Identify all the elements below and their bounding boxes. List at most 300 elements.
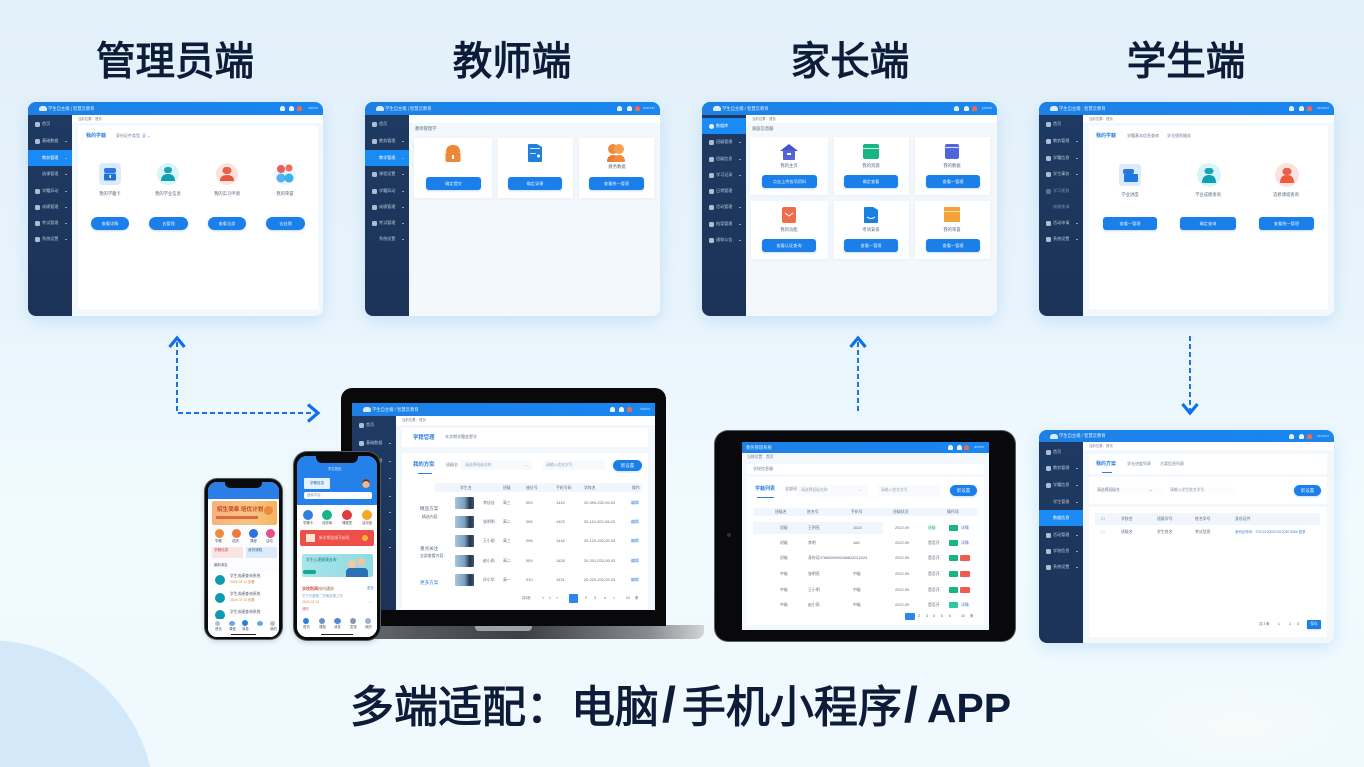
admin sidebar: 考试管理 <box>42 220 58 225</box>
title: student: 学生端 <box>1127 40 1245 84</box>
tablet table card: 请输入姓名学号 <box>881 488 908 492</box>
tablet screen: 当前位置：首页 <box>747 455 774 459</box>
card labels <box>99 190 294 196</box>
card labels: 我的实习申请 <box>214 191 240 196</box>
laptop table: 006 <box>526 519 532 524</box>
tablet table: 王小明 <box>808 587 820 592</box>
card: blue file: 考试安排 <box>862 227 880 232</box>
card: orange group <box>579 138 654 198</box>
card: green: 我的资源 <box>862 163 880 168</box>
large phone icon row: 活动室 <box>362 521 372 525</box>
laptop base <box>342 625 704 639</box>
student sidebar: 活动申请 <box>1053 220 1069 225</box>
admin sidebar: 选课管理 <box>42 171 58 176</box>
large phone icon row: 课程表 <box>342 521 352 525</box>
table card: 身份证件 <box>1235 516 1251 521</box>
laptop table: 1431 <box>556 577 565 582</box>
pagination: 3 <box>1297 622 1299 626</box>
large phone icon row: 成绩单 <box>322 521 332 525</box>
table view sidebar: 学校信息 <box>1053 548 1069 553</box>
laptop table: 20-090-202-09-03 <box>584 500 615 505</box>
card: indigo: 我的数据 <box>943 163 961 168</box>
student sidebar: 首页 <box>1053 121 1061 126</box>
laptop screen <box>352 403 655 610</box>
tablet table: 初级 <box>780 555 788 560</box>
large phone name card: 学籍信息 <box>310 481 324 485</box>
card: red clipboard <box>751 201 828 259</box>
laptop bezel <box>341 388 666 626</box>
large phone name card <box>304 478 330 489</box>
laptop table: 20-110-202-09-03 <box>584 519 615 524</box>
student sidebar: 学习规划 <box>1053 188 1069 193</box>
card labels: 我的学业信息 <box>155 191 181 196</box>
laptop table: 操作 <box>632 485 640 490</box>
icon: red user <box>216 163 238 185</box>
large phone text rows <box>302 586 374 611</box>
title: parent: 家长端 <box>791 40 909 84</box>
tablet table: 操作项 <box>947 509 959 514</box>
laptop button <box>613 460 642 471</box>
laptop table: 编辑 <box>631 577 639 582</box>
tablet table: 中级 <box>853 602 861 607</box>
tablet pagination <box>905 613 974 620</box>
laptop table: 1415 <box>556 500 565 505</box>
table card: 学校名 <box>1121 516 1133 521</box>
card: orange group: 教务数据 <box>608 164 626 169</box>
icon: group <box>274 163 296 185</box>
large phone blue header <box>297 456 377 505</box>
admin sidebar <box>28 102 72 316</box>
laptop table: 孙小华 <box>483 577 495 582</box>
student sidebar <box>1039 102 1083 316</box>
laptop table: 003 <box>526 500 532 505</box>
pagination: 2 <box>1289 622 1291 626</box>
card: blue file: 查看一管理 <box>861 243 881 248</box>
admin content card: 身份证件类型 <box>116 133 140 138</box>
parent section heading: 家庭信息服 <box>752 126 773 131</box>
tablet table: 2022.09 <box>895 587 909 592</box>
panel: student dashboard: 当前位置：首页 <box>1089 117 1113 121</box>
laptop header: 学生自主端 / 智慧云教育 <box>372 407 419 412</box>
card: green <box>834 137 909 195</box>
bottom caption: 多端适配：电脑/手机小程序/APP <box>350 677 1011 733</box>
tablet pagination: 6 <box>949 614 951 618</box>
small phone tab bar: 首页 <box>215 627 222 631</box>
tablet table: 2022.09 <box>895 602 909 607</box>
laptop screen: 当前位置：首页 <box>402 418 426 422</box>
tablet table: 2022.09 <box>895 540 909 545</box>
tablet table card <box>747 477 984 625</box>
laptop pagination <box>522 594 638 603</box>
small phone screen <box>208 482 279 637</box>
arrow: down from student <box>1181 336 1199 416</box>
laptop table: 20-120-202-09-03 <box>584 538 615 543</box>
card: red clipboard: 我的功能 <box>780 227 798 232</box>
laptop table: 手机号码 <box>556 485 572 490</box>
card buttons: 查看一管理 <box>1120 221 1140 226</box>
teacher sidebar: 教务管理 <box>379 138 395 143</box>
card: green: 确定查看 <box>863 179 879 184</box>
large phone tab bar: 发现 <box>350 625 357 629</box>
large phone tab bar: 课程 <box>319 625 326 629</box>
device: small phone <box>205 479 282 639</box>
table view sidebar: 教务管理 <box>1053 465 1069 470</box>
laptop table: 编辑 <box>631 558 639 563</box>
card buttons: 去处理 <box>279 221 292 226</box>
card labels: 学业进度 <box>1121 192 1139 197</box>
filter card: 请输入学生姓名学号 <box>1170 488 1204 492</box>
small phone icon row: 学籍 <box>215 539 222 543</box>
teacher header bar: 学生自主端 | 智慧云教育 <box>385 106 431 111</box>
panel: student dashboard <box>1039 102 1334 316</box>
small phone top bar <box>208 482 279 499</box>
card: blue file <box>834 201 909 259</box>
parent sidebar: 数据库 <box>716 123 728 128</box>
card: orange box: 查看一管理 <box>943 243 963 248</box>
tablet header: admin <box>974 445 984 449</box>
small phone tab bar: 课程 <box>229 627 236 631</box>
laptop table: 010 <box>526 577 532 582</box>
tablet table: 手机号 <box>851 509 863 514</box>
small phone tab bar: 我的 <box>270 627 277 631</box>
tablet table: 王明亮 <box>808 525 820 530</box>
tablet table: 班级状况 <box>893 509 909 514</box>
student sidebar: 成绩查询 <box>1053 204 1069 209</box>
laptop pagination: > <box>613 596 615 600</box>
card: orange box: 我的荣誉 <box>943 227 961 232</box>
tablet pagination: 3 <box>926 614 928 618</box>
student sidebar: 教务管理 <box>1053 138 1069 143</box>
tablet table: 中级 <box>780 587 788 592</box>
teacher sidebar: 学籍异动 <box>379 188 395 193</box>
table view header: 学生自主端 / 智慧云教育 <box>1059 433 1106 438</box>
small phone promo banner: 招生简章 培优计划 <box>217 507 263 513</box>
small phone two tiles <box>212 547 277 558</box>
laptop header: admin <box>640 407 650 411</box>
card labels: 我的学籍卡 <box>99 191 121 196</box>
tablet table: 班级 <box>928 525 936 530</box>
admin header bar: 学生自主端 | 智慧云教育 <box>48 106 94 111</box>
title: admin: 管理员端 <box>96 40 254 84</box>
pagination: 1 <box>1278 622 1280 626</box>
panel: admin dashboard: 当前位置：首页 <box>78 117 102 121</box>
small phone icon row: 课程 <box>250 539 257 543</box>
laptop table card: 我的方案 <box>413 462 435 468</box>
admin content card: 我的学籍 <box>86 133 106 139</box>
card: home: 我的主页 <box>780 163 798 168</box>
card: orange lock: 确定提交 <box>445 181 462 186</box>
large phone icon row <box>303 510 372 525</box>
admin content card: 全 ⌄ <box>142 133 150 138</box>
tabs card <box>1089 454 1327 474</box>
card: home: 点击上传各项资料 <box>773 179 806 184</box>
laptop sidebar: 首页 <box>366 422 374 427</box>
card labels: 学业成绩查询 <box>1195 192 1221 197</box>
small phone list: 学生成绩查询系统 <box>230 574 260 578</box>
large phone screen <box>297 456 377 637</box>
teacher sidebar: 首页 <box>379 121 387 126</box>
large phone red banner: 新学期选课开始啦 <box>319 536 349 540</box>
small phone tab bar: 消息 <box>242 627 249 631</box>
card labels: 选修课程查询 <box>1273 192 1299 197</box>
card buttons: 去管理 <box>162 221 175 226</box>
icon: blue folder <box>1119 164 1141 186</box>
laptop table: 高二 <box>503 558 511 563</box>
large phone avatar <box>362 479 370 488</box>
laptop table: 1416 <box>556 538 565 543</box>
parent header bar: 学生自主端 / 智慧云教育 <box>722 106 769 111</box>
table view header <box>1039 430 1334 442</box>
laptop table <box>420 483 642 586</box>
arrow: up to parent <box>849 336 867 411</box>
laptop table card <box>402 453 648 609</box>
laptop sidebar: 教务管理 <box>366 458 382 463</box>
laptop header <box>352 403 655 416</box>
laptop pagination: 1 <box>549 596 551 600</box>
tablet pagination: 2 <box>918 614 920 618</box>
table card: 身份证号码：370101200001012030 5566 登录 <box>1235 530 1306 534</box>
student content card: 学业规划服务 <box>1167 133 1191 138</box>
teacher sidebar: 课程设置 <box>379 171 395 176</box>
laptop table: 编辑 <box>631 519 639 524</box>
student header bar <box>1039 102 1334 115</box>
large phone tab bar <box>297 616 377 637</box>
small phone tab bar <box>208 619 279 637</box>
laptop table: 赵小雨 <box>483 558 495 563</box>
admin sidebar: 系统设置 <box>42 236 58 241</box>
laptop table: 编辑 <box>631 538 639 543</box>
laptop table: 学生名 <box>460 485 472 490</box>
tablet table: 详情 <box>961 525 969 530</box>
table card: 班级名 <box>1121 529 1133 534</box>
tablet camera <box>727 533 731 537</box>
table view sidebar: 首页 <box>1053 449 1061 454</box>
tablet table: 是否开 <box>928 555 940 560</box>
large phone blue header: 学生首页 <box>328 467 342 471</box>
large phone text rows: 校内通知 <box>318 586 334 591</box>
laptop table: 精选内容 <box>422 514 438 519</box>
table card: 考试信息 <box>1195 529 1211 534</box>
laptop table: 精品方案 <box>420 506 438 511</box>
table view header: student <box>1317 434 1329 438</box>
laptop table: 学校名 <box>584 485 596 490</box>
icon: teal user <box>1197 163 1221 187</box>
device: tablet <box>715 431 1015 641</box>
tablet table: 班级名 <box>775 509 787 514</box>
large phone teal banner <box>302 554 373 577</box>
tablet table: 是否开 <box>928 571 940 576</box>
card: orange box <box>915 201 990 259</box>
filter card <box>1089 477 1327 504</box>
large phone search: 搜索内容 <box>307 493 321 497</box>
tablet table: 中级 <box>780 571 788 576</box>
small phone list: 学生成绩查询系统 <box>230 592 260 596</box>
laptop table: 高三 <box>503 538 511 543</box>
tablet table card: 请选择班级名称 ⌄ <box>801 488 862 492</box>
card buttons: 确定查询 <box>1200 221 1216 226</box>
admin header bar <box>28 102 323 115</box>
laptop table: 全部查看内容 <box>420 553 443 558</box>
icon: red user <box>1275 163 1299 187</box>
card: blue document <box>498 138 573 198</box>
tablet table card: 学籍列表 <box>755 486 775 492</box>
parent sidebar: 档案管理 <box>716 221 732 226</box>
tablet table: 初级 <box>780 540 788 545</box>
panel: student table view <box>1039 430 1334 643</box>
tablet table: 初级 <box>780 525 788 530</box>
tablet pagination: 条 <box>970 614 973 618</box>
tablet screen <box>742 442 989 630</box>
laptop pagination: 条 <box>635 596 638 600</box>
table card <box>1089 507 1327 637</box>
card: indigo <box>915 137 990 195</box>
large phone icon row: 学籍卡 <box>303 521 313 525</box>
tablet table: 身份证3788899000088823012024 <box>808 555 867 560</box>
large phone teal banner: 学生心理健康咨询 <box>306 558 336 562</box>
laptop hinge notch <box>475 626 532 631</box>
laptop table: 编辑 <box>631 500 639 505</box>
tablet header <box>742 442 989 453</box>
laptop table: 李佳佳 <box>483 500 495 505</box>
small phone icon row: 成绩 <box>232 539 239 543</box>
parent sidebar: 日常管理 <box>716 188 732 193</box>
parent sidebar: 班级管理 <box>716 139 732 144</box>
tablet table: 是否开 <box>928 587 940 592</box>
laptop table: 高二 <box>503 519 511 524</box>
laptop table: 1428 <box>556 558 565 563</box>
student content card: 学籍基本信息查询 <box>1127 133 1159 138</box>
card buttons: 查看全部 <box>219 221 235 226</box>
small phone list: 2024 03 13 查看 <box>230 598 255 602</box>
teacher header bar: teacher <box>643 106 655 110</box>
laptop pagination: 2 <box>585 596 587 600</box>
laptop table: 20-220-202-09-03 <box>584 577 615 582</box>
tablet heading card: 学校信息服 <box>753 466 773 471</box>
parent header bar: parent <box>982 106 992 110</box>
table card: 班级学号 <box>1157 516 1173 521</box>
laptop button: 新设置 <box>621 463 634 468</box>
laptop table: 张明明 <box>483 519 495 524</box>
table view sidebar: 系统设置 <box>1053 564 1069 569</box>
tablet table: 是否开 <box>928 540 940 545</box>
tablet button <box>950 485 977 496</box>
laptop table: 王小丽 <box>483 538 495 543</box>
card: orange lock <box>414 138 492 198</box>
tablet table: 张明亮 <box>808 571 820 576</box>
laptop table: 更多方案 <box>420 580 438 585</box>
laptop table: 008 <box>526 538 532 543</box>
teacher sidebar: 成绩管理 <box>379 204 395 209</box>
small phone icon row <box>215 529 275 543</box>
large phone text rows: 更多 <box>367 586 374 590</box>
table card: 姓名学号 <box>1195 516 1211 521</box>
laptop table: 20-201-202-09-03 <box>584 558 615 563</box>
tablet table: 2022.09 <box>895 571 909 576</box>
laptop title card: 本学期学籍变更学 <box>445 434 477 439</box>
student sidebar: 系统设置 <box>1053 236 1069 241</box>
laptop title card <box>402 428 648 447</box>
laptop table: 高一 <box>503 577 511 582</box>
laptop pagination: 4 <box>604 596 606 600</box>
laptop table: 009 <box>526 558 532 563</box>
large phone text rows: 通知 <box>302 607 309 611</box>
parent sidebar: 活动管理 <box>716 204 732 209</box>
laptop table card: 班级名 <box>446 462 458 467</box>
large phone text rows: 2024 03 12 <box>302 600 319 604</box>
pagination <box>1259 620 1322 631</box>
student content card: 我的学籍 <box>1096 133 1116 139</box>
admin sidebar: 首页 <box>42 121 50 126</box>
laptop table: 座位号 <box>526 485 538 490</box>
small phone list: 学生成绩查询系统 <box>230 610 260 614</box>
laptop pagination: < <box>542 596 544 600</box>
tablet table: 中级 <box>853 587 861 592</box>
parent sidebar: 学习记录 <box>716 172 732 177</box>
laptop table card: 请输入姓名学号 <box>546 463 573 467</box>
panel: admin dashboard <box>28 102 323 316</box>
small phone two tiles: 学籍信息 <box>214 548 228 552</box>
small phone list <box>208 572 279 620</box>
laptop sidebar <box>352 416 396 610</box>
tablet table: 中级 <box>853 571 861 576</box>
laptop title card: 学籍管理 <box>413 435 435 441</box>
tabs card: 方案信息列表 <box>1160 461 1184 466</box>
tablet pagination: 10 <box>961 614 965 618</box>
table card: 学生姓名 <box>1157 529 1173 534</box>
card buttons <box>90 217 306 232</box>
laptop table: 1423 <box>556 519 565 524</box>
small phone promo banner <box>212 501 277 525</box>
tablet button: 新设置 <box>957 488 970 493</box>
icon: teal user <box>157 163 179 185</box>
tabs card: 学业进度列表 <box>1127 461 1151 466</box>
filter button <box>1294 485 1321 496</box>
large phone tab bar: 我的 <box>365 625 372 629</box>
large phone tab bar: 消息 <box>334 625 341 629</box>
admin sidebar: 基础数据 <box>42 138 58 143</box>
student sidebar: 学生事务 <box>1053 171 1069 176</box>
laptop pagination: 3 <box>594 596 596 600</box>
device: large phone <box>294 452 380 640</box>
tablet table: 赵小雨 <box>808 602 820 607</box>
tablet table: 详情 <box>961 540 969 545</box>
parent sidebar: 班级信息 <box>716 156 732 161</box>
teacher sidebar: 教学管理 <box>379 155 395 160</box>
filter button: 新设置 <box>1301 488 1314 493</box>
small phone icon row: 活动 <box>266 539 273 543</box>
parent header bar <box>702 102 997 115</box>
tablet table: 详情 <box>961 602 969 607</box>
teacher sidebar: 系统设置 <box>379 236 395 241</box>
large phone search <box>304 492 372 499</box>
laptop pagination: < <box>556 596 558 600</box>
student sidebar: 学籍信息 <box>1053 155 1069 160</box>
table card: ☐ <box>1101 529 1104 534</box>
large phone notch <box>316 456 358 463</box>
card: home <box>750 137 828 195</box>
icon: blue folder <box>99 163 121 185</box>
laptop sidebar: 基础数据 <box>366 440 382 445</box>
teacher sidebar: 考试管理 <box>379 220 395 225</box>
table card: ☐ <box>1101 516 1104 521</box>
student content card <box>1089 126 1328 309</box>
table view sidebar: 学生管理 <box>1053 499 1069 504</box>
large phone text rows: 关于开展第二学期选课工作 <box>302 594 343 598</box>
tablet table: 168 <box>853 540 860 545</box>
teacher section heading: 教师管理学 <box>415 126 436 131</box>
card buttons <box>1102 217 1315 232</box>
card buttons: 查看详情 <box>102 221 118 226</box>
